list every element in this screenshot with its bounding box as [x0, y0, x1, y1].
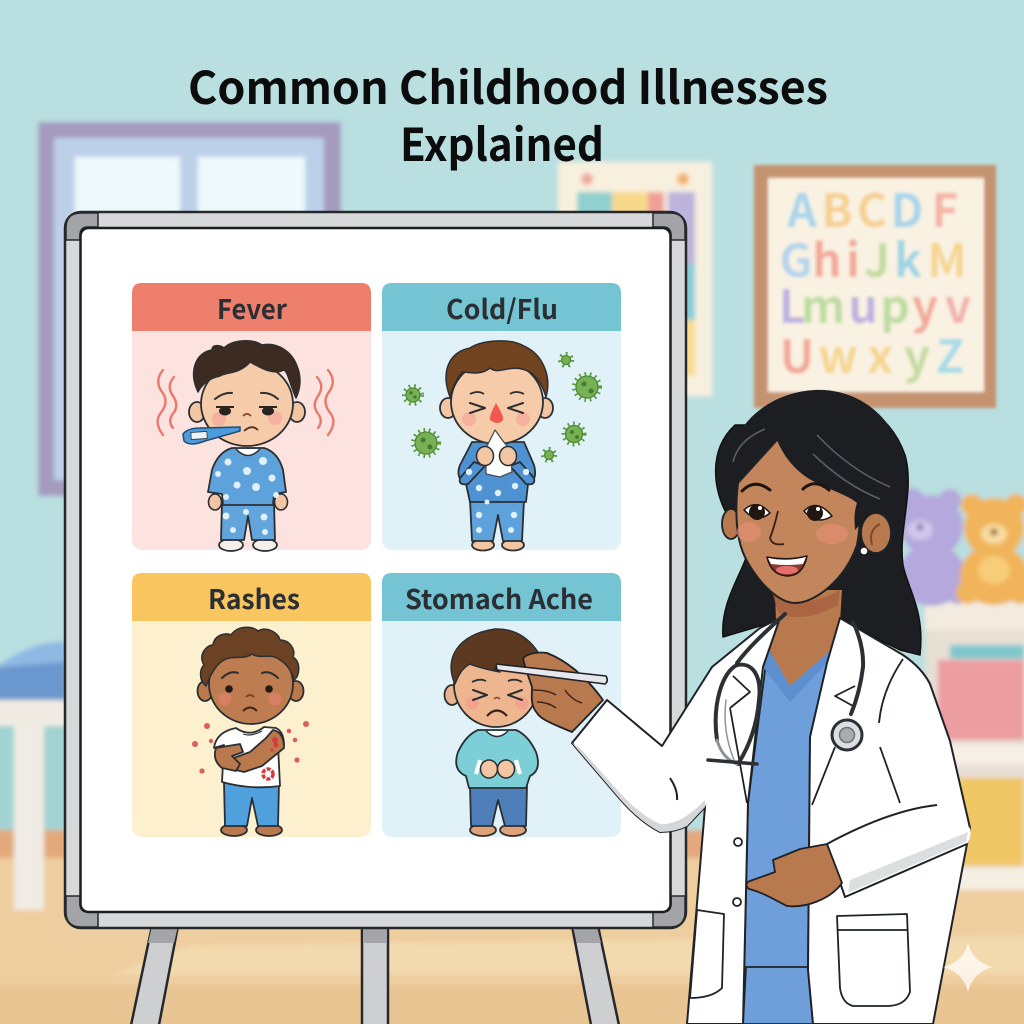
alphabet poster: y	[912, 271, 938, 337]
scrubs	[743, 647, 832, 1024]
alphabet poster: k	[894, 225, 922, 291]
icon: child with stomach ache	[444, 629, 548, 836]
watermark sparkle	[943, 943, 993, 992]
pocket right	[837, 914, 910, 1006]
alphabet poster: M	[927, 225, 967, 291]
alphabet poster: D	[891, 175, 923, 241]
sleeve outline	[827, 805, 967, 897]
icon: child with rash	[192, 627, 309, 836]
title	[188, 52, 828, 174]
doctor pointing arm	[572, 667, 732, 832]
orange teddy bear	[956, 494, 1024, 605]
heading: cold/flu: Cold/Flu	[446, 288, 558, 327]
pocket left	[690, 910, 724, 998]
shelves	[920, 602, 1024, 890]
alphabet poster: J	[864, 225, 890, 291]
alphabet poster: m	[801, 271, 845, 337]
heading: fever: Fever	[217, 288, 287, 327]
alphabet poster: x	[867, 321, 893, 387]
scrub pants	[743, 967, 813, 1024]
doctor hand with pointer	[496, 653, 607, 732]
lab coat	[687, 618, 970, 1024]
alphabet poster: w	[818, 321, 858, 387]
panel: cold and flu	[382, 283, 621, 550]
alphabet poster: y	[904, 321, 930, 387]
stethoscope	[708, 614, 863, 764]
doctor right sleeve	[827, 805, 970, 897]
alphabet poster: L	[779, 271, 805, 337]
exam bed	[0, 642, 66, 910]
heading: rashes: Rashes	[208, 578, 300, 617]
alphabet poster: h	[812, 225, 842, 291]
alphabet poster: Z	[936, 321, 964, 387]
panel: stomach ache	[382, 573, 621, 837]
doctor head	[722, 390, 905, 603]
arm shadow	[572, 743, 705, 832]
doctor hair back	[716, 398, 921, 655]
arm outline	[572, 667, 712, 832]
panel: fever	[132, 283, 371, 551]
alphabet poster: p	[880, 271, 910, 337]
icon: child with cold	[440, 341, 553, 550]
alphabet poster: U	[780, 321, 814, 387]
alphabet poster: F	[932, 175, 958, 241]
doctor neck	[768, 590, 842, 686]
icon: child with fever	[158, 341, 333, 551]
doctor lower hand	[746, 844, 842, 906]
alphabet poster: C	[857, 175, 887, 241]
alphabet poster: i	[846, 225, 860, 291]
small chart poster	[558, 162, 712, 396]
whiteboard	[65, 212, 686, 928]
title: Explained	[400, 109, 604, 174]
sleeve shadow	[848, 832, 968, 893]
alphabet poster	[754, 165, 996, 408]
easel legs	[130, 926, 620, 1024]
panel: rashes	[132, 573, 371, 837]
alphabet poster: v	[945, 271, 971, 337]
icon: germs	[404, 354, 600, 460]
doctor	[496, 390, 970, 1024]
alphabet poster: B	[821, 175, 853, 241]
purple teddy bear	[896, 488, 970, 606]
heading: stomach ache: Stomach Ache	[405, 578, 593, 617]
alphabet poster: A	[786, 175, 817, 241]
window	[38, 122, 341, 496]
title: Common Childhood Illnesses	[188, 52, 828, 117]
alphabet poster: u	[848, 271, 878, 337]
alphabet poster: G	[780, 225, 812, 291]
